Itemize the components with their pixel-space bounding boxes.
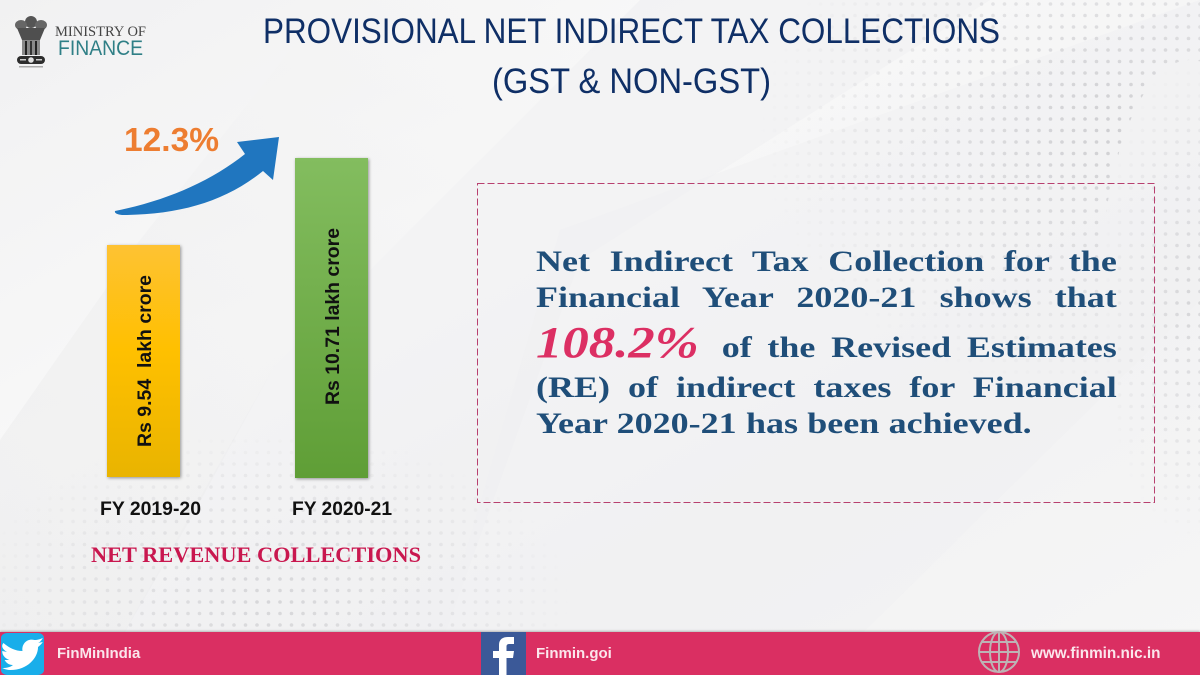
arrow: growth (114, 137, 279, 215)
callout text (536, 245, 1117, 440)
website: www.finmin.nic.in (1031, 645, 1160, 662)
callout text: Financial Year 2020-21 shows that (536, 281, 1117, 314)
callout text: 108.2% of the Revised Estimates (536, 318, 1117, 367)
title: (GST & NON-GST) (492, 62, 771, 101)
axis labels: FY 2020-21 (292, 498, 392, 520)
axis labels: NET REVENUE COLLECTIONS (91, 542, 421, 567)
wordmark (55, 24, 146, 60)
wordmark: MINISTRY OF (55, 24, 146, 40)
callout text: Year 2020-21 has been achieved. (536, 407, 1032, 440)
facebook handle: Finmin.goi (536, 645, 612, 662)
icon: facebook (481, 632, 526, 675)
bar: FY 2019-20: Rs 9.54 lakh crore (135, 275, 156, 447)
title (263, 12, 1000, 101)
title: PROVISIONAL NET INDIRECT TAX COLLECTIONS (263, 12, 1000, 51)
growth label: 12.3% (124, 122, 219, 159)
wordmark: FINANCE (58, 36, 143, 60)
bar chart (91, 157, 421, 567)
icon: national emblem (15, 16, 47, 68)
callout text: Net Indirect Tax Collection for the (536, 245, 1117, 278)
axis labels (91, 498, 421, 567)
bar: FY 2020-21: Rs 10.71 lakh crore (323, 228, 344, 405)
icon: twitter (1, 633, 44, 675)
axis labels: FY 2019-20 (100, 498, 201, 520)
bar: FY 2019-20 (107, 245, 180, 477)
footer bar (0, 632, 1200, 675)
icon: globe (978, 631, 1020, 673)
panel: callout (477, 183, 1155, 503)
logo: Ministry of Finance (15, 16, 146, 68)
twitter handle: FinMinIndia (57, 645, 140, 662)
bar: FY 2020-21 (295, 158, 368, 478)
callout text: (RE) of indirect taxes for Financial (536, 371, 1117, 404)
